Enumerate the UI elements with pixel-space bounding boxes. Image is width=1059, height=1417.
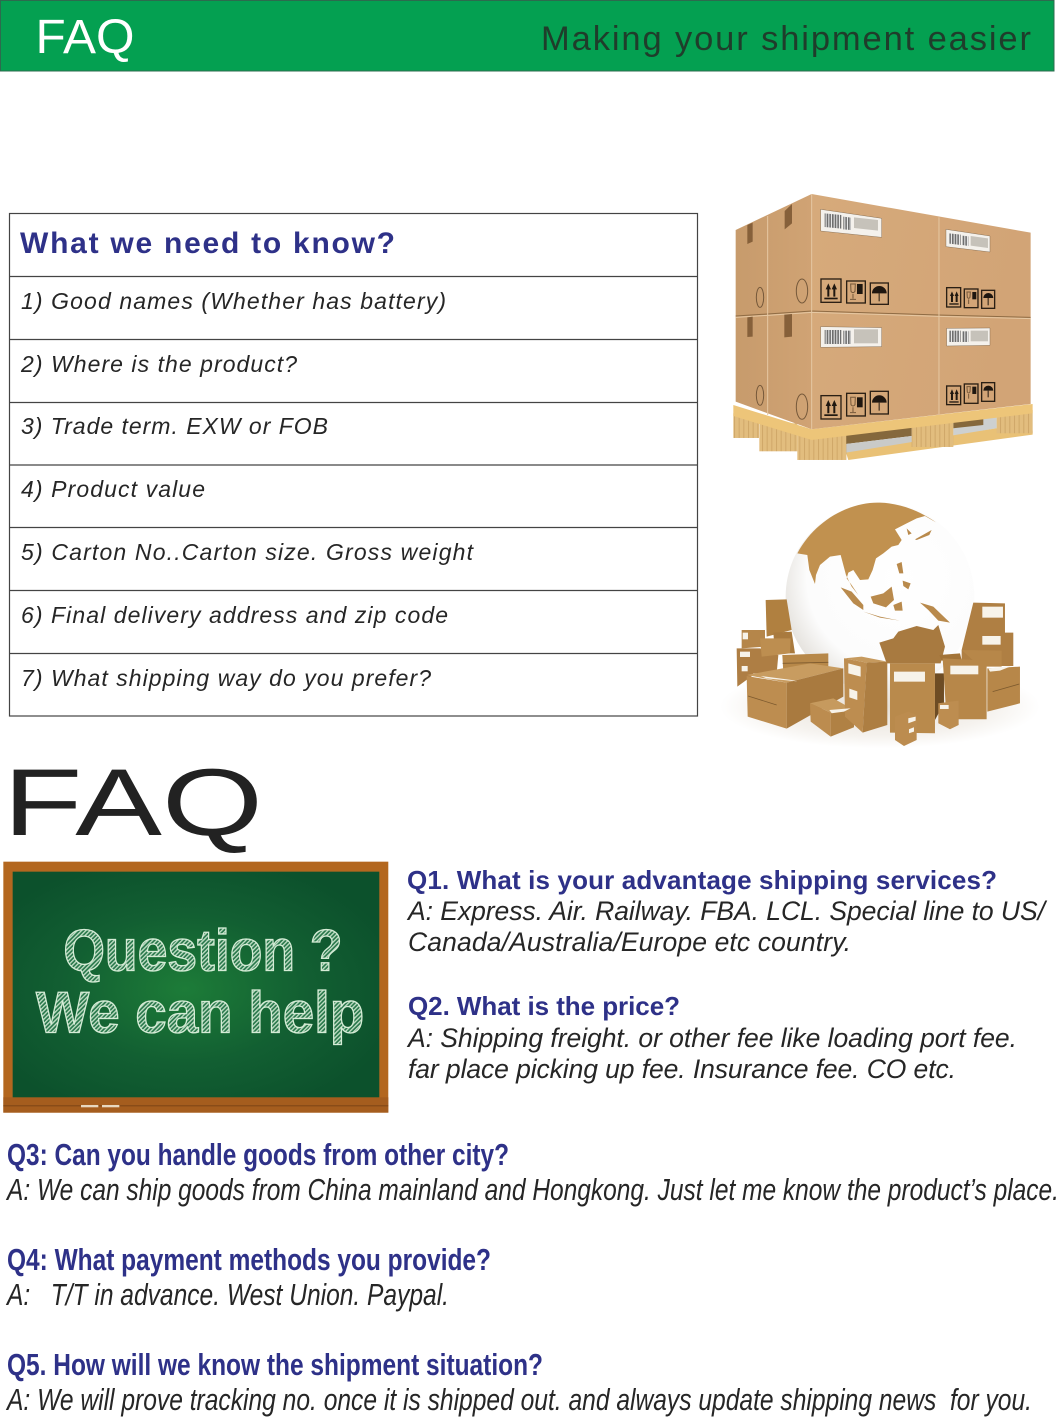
Q1 block <box>406 865 1048 957</box>
item 4: 4) Product value <box>21 476 205 502</box>
Q2 answer: A: Shipping freight. or other fee like loading port fee. <box>406 1023 1017 1053</box>
Q5 block <box>5 1347 1032 1417</box>
chalk text: Question ?: Question ? <box>63 919 343 984</box>
panel heading: What we need to know? <box>20 227 395 260</box>
panel: what we need to know <box>9 214 698 716</box>
Q5 block: Q5. How will we know the shipment situation? <box>7 1347 543 1382</box>
large FAQ heading: FAQ <box>3 750 263 856</box>
Q3 block <box>5 1137 1059 1207</box>
Q3 block: Q3: Can you handle goods from other city? <box>7 1137 509 1172</box>
Q2 answer: far place picking up fee. Insurance fee. CO etc. <box>408 1054 956 1084</box>
Q2 block: Q2. What is the price? <box>408 991 680 1021</box>
Q1 answer: Canada/Australia/Europe etc country. <box>408 927 851 957</box>
Q2 block <box>406 991 1017 1084</box>
header tagline: Making your shipment easier <box>541 20 1031 58</box>
image: cartons on pallet <box>733 194 1033 460</box>
header title: FAQ: FAQ <box>36 11 134 64</box>
Q4 block <box>5 1242 491 1312</box>
Q2 answer <box>406 1023 1017 1084</box>
Q1 answer: A: Express. Air. Railway. FBA. LCL. Special line to US/ <box>406 896 1048 926</box>
item 1: 1) Good names (Whether has battery) <box>21 288 446 314</box>
Q1 answer <box>406 896 1048 957</box>
Q4 block: Q4: What payment methods you provide? <box>7 1242 491 1277</box>
item 7: 7) What shipping way do you prefer? <box>21 665 431 691</box>
item 6: 6) Final delivery address and zip code <box>21 602 448 628</box>
image: chalkboard <box>3 862 388 1113</box>
item 2: 2) Where is the product? <box>20 351 297 377</box>
item 5: 5) Carton No..Carton size. Gross weight <box>21 539 475 565</box>
Q4 answer: A: T/T in advance. West Union. Paypal. <box>5 1277 449 1312</box>
item 3: 3) Trade term. EXW or FOB <box>21 413 328 439</box>
chalk text: We can help: We can help <box>36 981 364 1046</box>
header banner <box>0 0 1054 71</box>
image: globe with cartons <box>720 502 1040 748</box>
Q1 block: Q1. What is your advantage shipping services? <box>407 865 997 895</box>
